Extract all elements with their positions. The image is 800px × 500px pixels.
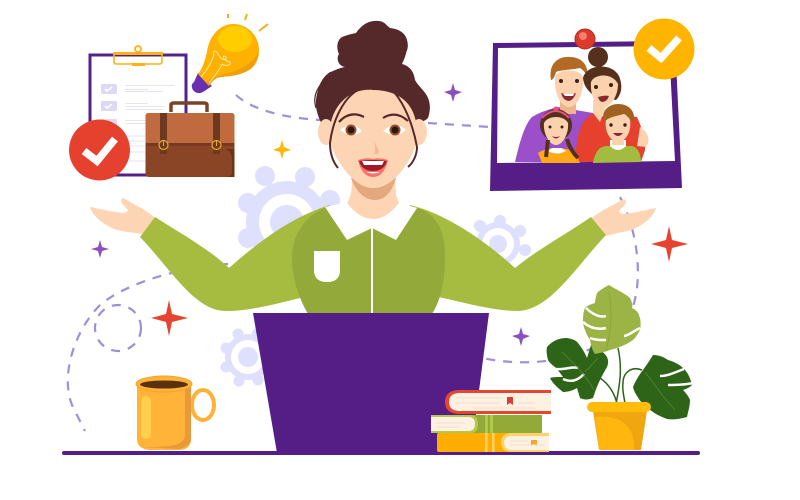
briefcase: [146, 103, 234, 177]
dashed connector paths: [68, 95, 638, 431]
icon: gear large: [238, 166, 340, 263]
table line: [62, 451, 700, 455]
family: girl: [538, 148, 580, 163]
family: boy: [593, 146, 641, 163]
leaf: dark right: [633, 355, 693, 419]
sparkle: red right: [651, 226, 688, 262]
book: green: [431, 415, 542, 433]
nose: [373, 138, 379, 154]
frame: [490, 41, 682, 191]
icon: gear right: [474, 215, 531, 266]
sparkle: purple top: [444, 83, 462, 102]
pin: [575, 29, 595, 49]
coffee mug: [136, 376, 214, 450]
stems: [600, 348, 642, 404]
torso: [292, 207, 445, 314]
hair back: [316, 21, 430, 135]
left arm: [90, 198, 155, 234]
book: yellow: [437, 433, 549, 452]
eyebrows: [339, 114, 408, 122]
leaf: dark left: [547, 338, 608, 400]
icon: red check badge: [69, 120, 130, 180]
potted plant: [547, 285, 693, 450]
curls: [330, 90, 417, 168]
photo frame with family: [490, 18, 694, 191]
mouth: [358, 158, 388, 177]
family: father: [515, 107, 593, 162]
stray hair strands: [315, 34, 407, 108]
pocket: [314, 251, 340, 282]
icon: light bulb: [192, 14, 268, 93]
book: red: [445, 390, 551, 414]
pot: [587, 402, 651, 450]
right arm: [591, 199, 656, 236]
clipboard: [90, 46, 186, 175]
woman: [90, 21, 656, 314]
eyes: [340, 125, 362, 135]
bulb socket: [192, 73, 212, 93]
sparkle: yellow: [273, 140, 291, 159]
leaf: light green top: [583, 285, 641, 354]
sparkle: purple right: [512, 327, 530, 346]
ears: [318, 119, 334, 145]
icon: gear lower left: [220, 328, 271, 386]
collar: [325, 202, 417, 240]
laptop: [253, 313, 489, 453]
family: mother: [575, 113, 645, 162]
neck: [347, 178, 399, 219]
sparkle: purple left: [91, 240, 109, 258]
books: [431, 390, 551, 452]
sparkle: red left: [151, 300, 188, 336]
sparkles: [91, 83, 688, 346]
face: [330, 90, 417, 188]
icon: yellow check badge: [634, 18, 694, 80]
